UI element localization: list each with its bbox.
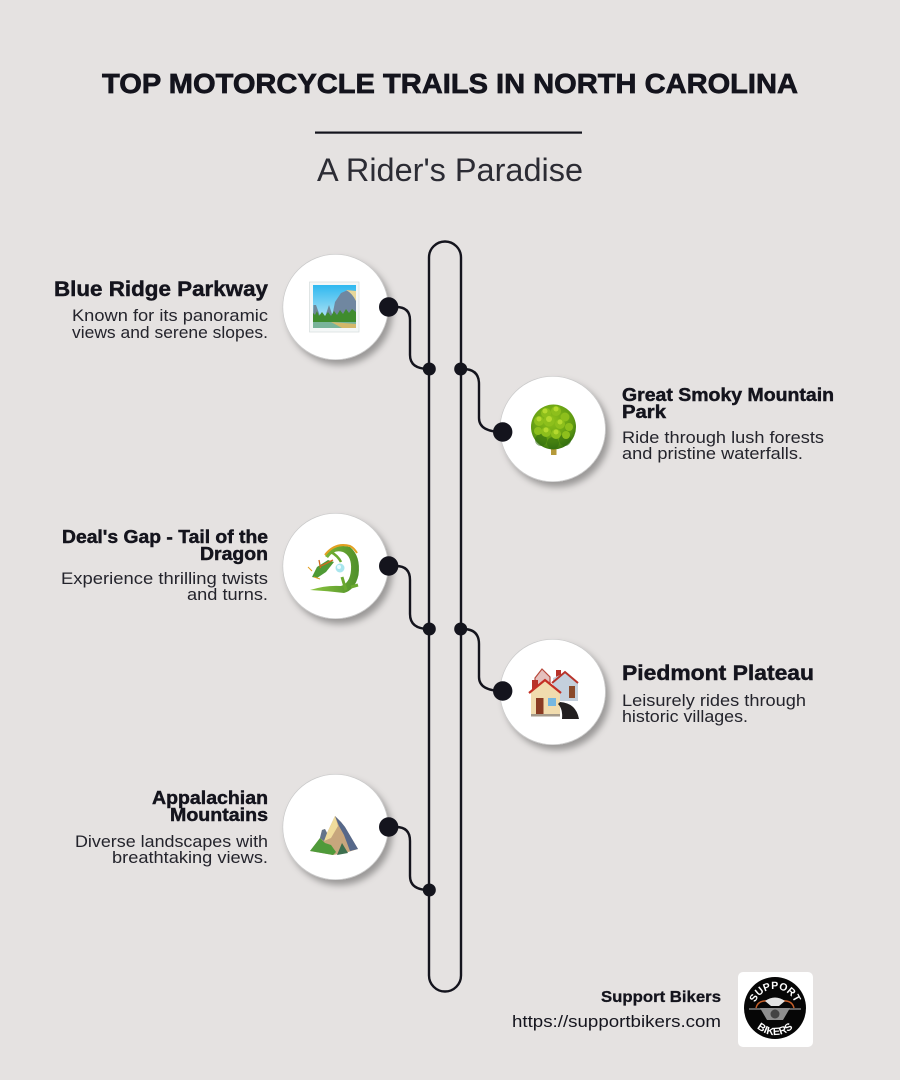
stop: Appalachian Mountains bbox=[75, 774, 436, 896]
connector dots bbox=[454, 362, 512, 442]
heading: Appalachian Mountains: Mountains bbox=[170, 805, 268, 825]
description: Appalachian Mountains bbox=[75, 833, 268, 867]
heading: Great Smoky Mountain Park bbox=[622, 385, 834, 422]
description: Blue Ridge Parkway: Known for its panoramic bbox=[72, 307, 268, 325]
connector bbox=[461, 369, 503, 432]
connector bbox=[389, 566, 429, 629]
heading: Deal's Gap bbox=[62, 527, 268, 564]
heading: Blue Ridge Parkway: Blue Ridge Parkway bbox=[54, 278, 268, 301]
connector dots bbox=[454, 622, 512, 701]
stop: Piedmont Plateau bbox=[454, 622, 814, 745]
description: Great Smoky Mountain Park bbox=[622, 429, 824, 463]
logo: BIKERS bbox=[757, 1022, 792, 1036]
logo: SUPPORT bbox=[750, 982, 802, 1002]
connector dots bbox=[379, 297, 436, 376]
connector bbox=[461, 629, 503, 691]
heading: Deal's Gap: Dragon bbox=[200, 544, 268, 564]
heading: Piedmont Plateau: Piedmont Plateau bbox=[622, 662, 814, 685]
icon circle: landscape photo bbox=[283, 254, 388, 360]
icon circle: houses bbox=[500, 639, 605, 745]
brand name: Support Bikers bbox=[601, 989, 721, 1006]
icon circle: mountain bbox=[283, 774, 388, 880]
description: Great Smoky Mountain Park: and pristine waterfalls. bbox=[622, 445, 803, 463]
connector bbox=[389, 827, 429, 890]
description: Deal's Gap bbox=[61, 570, 268, 604]
title rule bbox=[315, 132, 582, 134]
heading: Great Smoky Mountain Park: Great Smoky Mountain bbox=[622, 385, 834, 405]
connector bbox=[389, 307, 429, 369]
description: Piedmont Plateau: Leisurely rides through bbox=[622, 692, 806, 710]
stop: Blue Ridge Parkway bbox=[54, 254, 436, 376]
description: Deal's Gap: Experience thrilling twists bbox=[61, 570, 268, 588]
brand url: https://supportbikers.com bbox=[512, 1012, 721, 1031]
description: Piedmont Plateau: historic villages. bbox=[622, 708, 748, 726]
description: Great Smoky Mountain Park: Ride through lush forests bbox=[622, 429, 824, 447]
connector dots bbox=[379, 817, 436, 896]
logo bbox=[738, 972, 813, 1047]
icon circle: dragon bbox=[283, 513, 388, 619]
description: Piedmont Plateau bbox=[622, 692, 806, 726]
description: Blue Ridge Parkway: views and serene slopes. bbox=[72, 324, 268, 342]
title: TOP MOTORCYCLE TRAILS IN NORTH CAROLINA bbox=[102, 68, 798, 99]
central track bbox=[429, 242, 461, 992]
stop: Deal's Gap bbox=[61, 513, 436, 636]
description: Appalachian Mountains: breathtaking views. bbox=[112, 849, 268, 867]
description: Deal's Gap: and turns. bbox=[187, 586, 268, 604]
description: Blue Ridge Parkway bbox=[72, 307, 268, 342]
heading: Deal's Gap: Deal's Gap - Tail of the bbox=[62, 527, 268, 547]
connector dots bbox=[379, 556, 436, 636]
footer brand bbox=[512, 972, 813, 1047]
heading: Appalachian Mountains bbox=[152, 788, 268, 825]
heading: Great Smoky Mountain Park: Park bbox=[622, 402, 667, 422]
heading: Appalachian Mountains: Appalachian bbox=[152, 788, 268, 808]
description: Appalachian Mountains: Diverse landscapes with bbox=[75, 833, 268, 851]
icon circle: tree bbox=[500, 376, 605, 482]
stop: Great Smoky Mountain Park bbox=[454, 362, 834, 482]
subtitle: A Rider's Paradise bbox=[317, 152, 583, 188]
